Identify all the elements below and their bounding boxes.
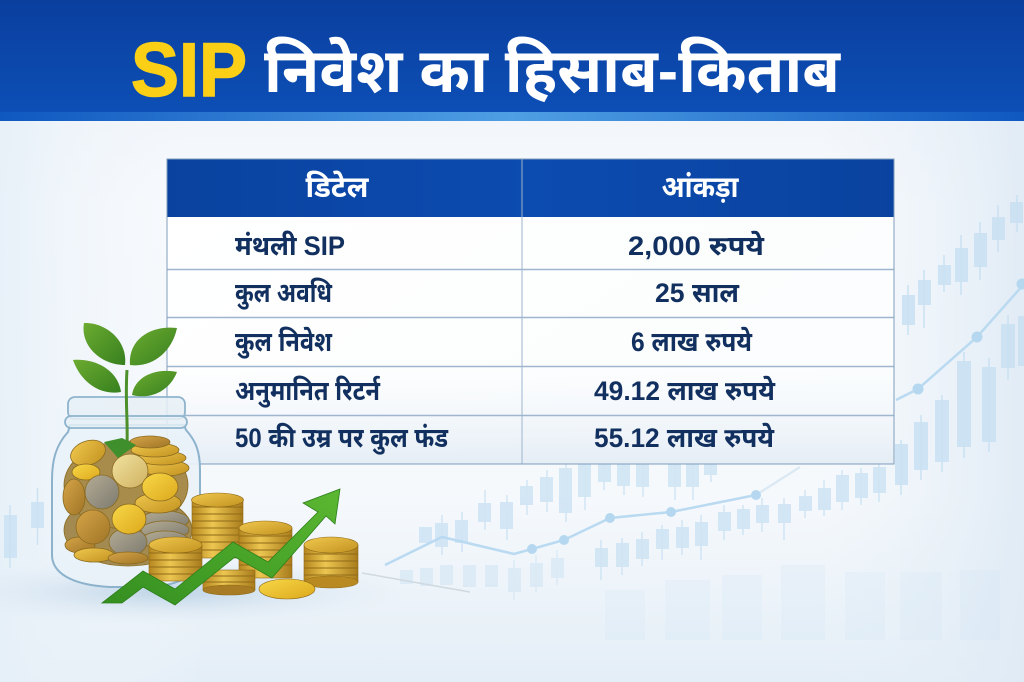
row: total investment: 6 लाख रुपये xyxy=(631,326,753,357)
stack right xyxy=(304,537,358,588)
background candlestick chart xyxy=(4,195,1024,640)
jar coins xyxy=(63,436,192,566)
loose coin xyxy=(259,579,315,599)
stack back-left xyxy=(192,493,244,558)
row: monthly SIP: मंथली SIP xyxy=(235,231,345,261)
table header xyxy=(167,159,894,217)
row: total investment xyxy=(235,326,753,358)
data table xyxy=(167,159,894,464)
row: monthly SIP xyxy=(235,230,765,261)
row: total fund at 50: 55.12 लाख रुपये xyxy=(594,422,775,453)
row: total investment: कुल निवेश xyxy=(235,326,332,358)
row: total fund at 50 xyxy=(235,422,775,454)
title banner xyxy=(0,0,1024,121)
row: estimated return: 49.12 लाख रुपये xyxy=(594,375,776,406)
table header: आंकड़ा xyxy=(662,171,740,204)
row: total duration: 25 साल xyxy=(655,278,740,308)
arrow: rising green trend xyxy=(102,489,340,605)
row: estimated return xyxy=(235,375,776,407)
jar glass xyxy=(52,425,200,587)
jar neck xyxy=(65,397,187,428)
row: monthly SIP: 2,000 रुपये xyxy=(628,230,765,261)
table header: डिटेल xyxy=(306,169,369,204)
row: estimated return: अनुमानित रिटर्न xyxy=(235,375,381,407)
icon: glass jar with coins xyxy=(52,397,200,587)
row: total fund at 50: 50 की उम्र पर कुल फंड xyxy=(235,422,449,454)
stack bottom-middle xyxy=(203,570,255,595)
background trend line with markers xyxy=(362,278,1024,592)
title text: SIP xyxy=(131,28,247,113)
stack front-left xyxy=(149,537,202,581)
row: total duration xyxy=(235,278,740,309)
ground shadow xyxy=(0,558,410,626)
title text: निवेश का हिसाब-किताब xyxy=(264,35,842,106)
table grid lines xyxy=(167,159,894,464)
row: total duration: कुल अवधि xyxy=(235,278,332,309)
icon: coin stacks xyxy=(149,493,358,599)
stack back-right xyxy=(239,521,292,578)
icon: plant sprout xyxy=(73,323,177,458)
title text xyxy=(131,28,842,113)
